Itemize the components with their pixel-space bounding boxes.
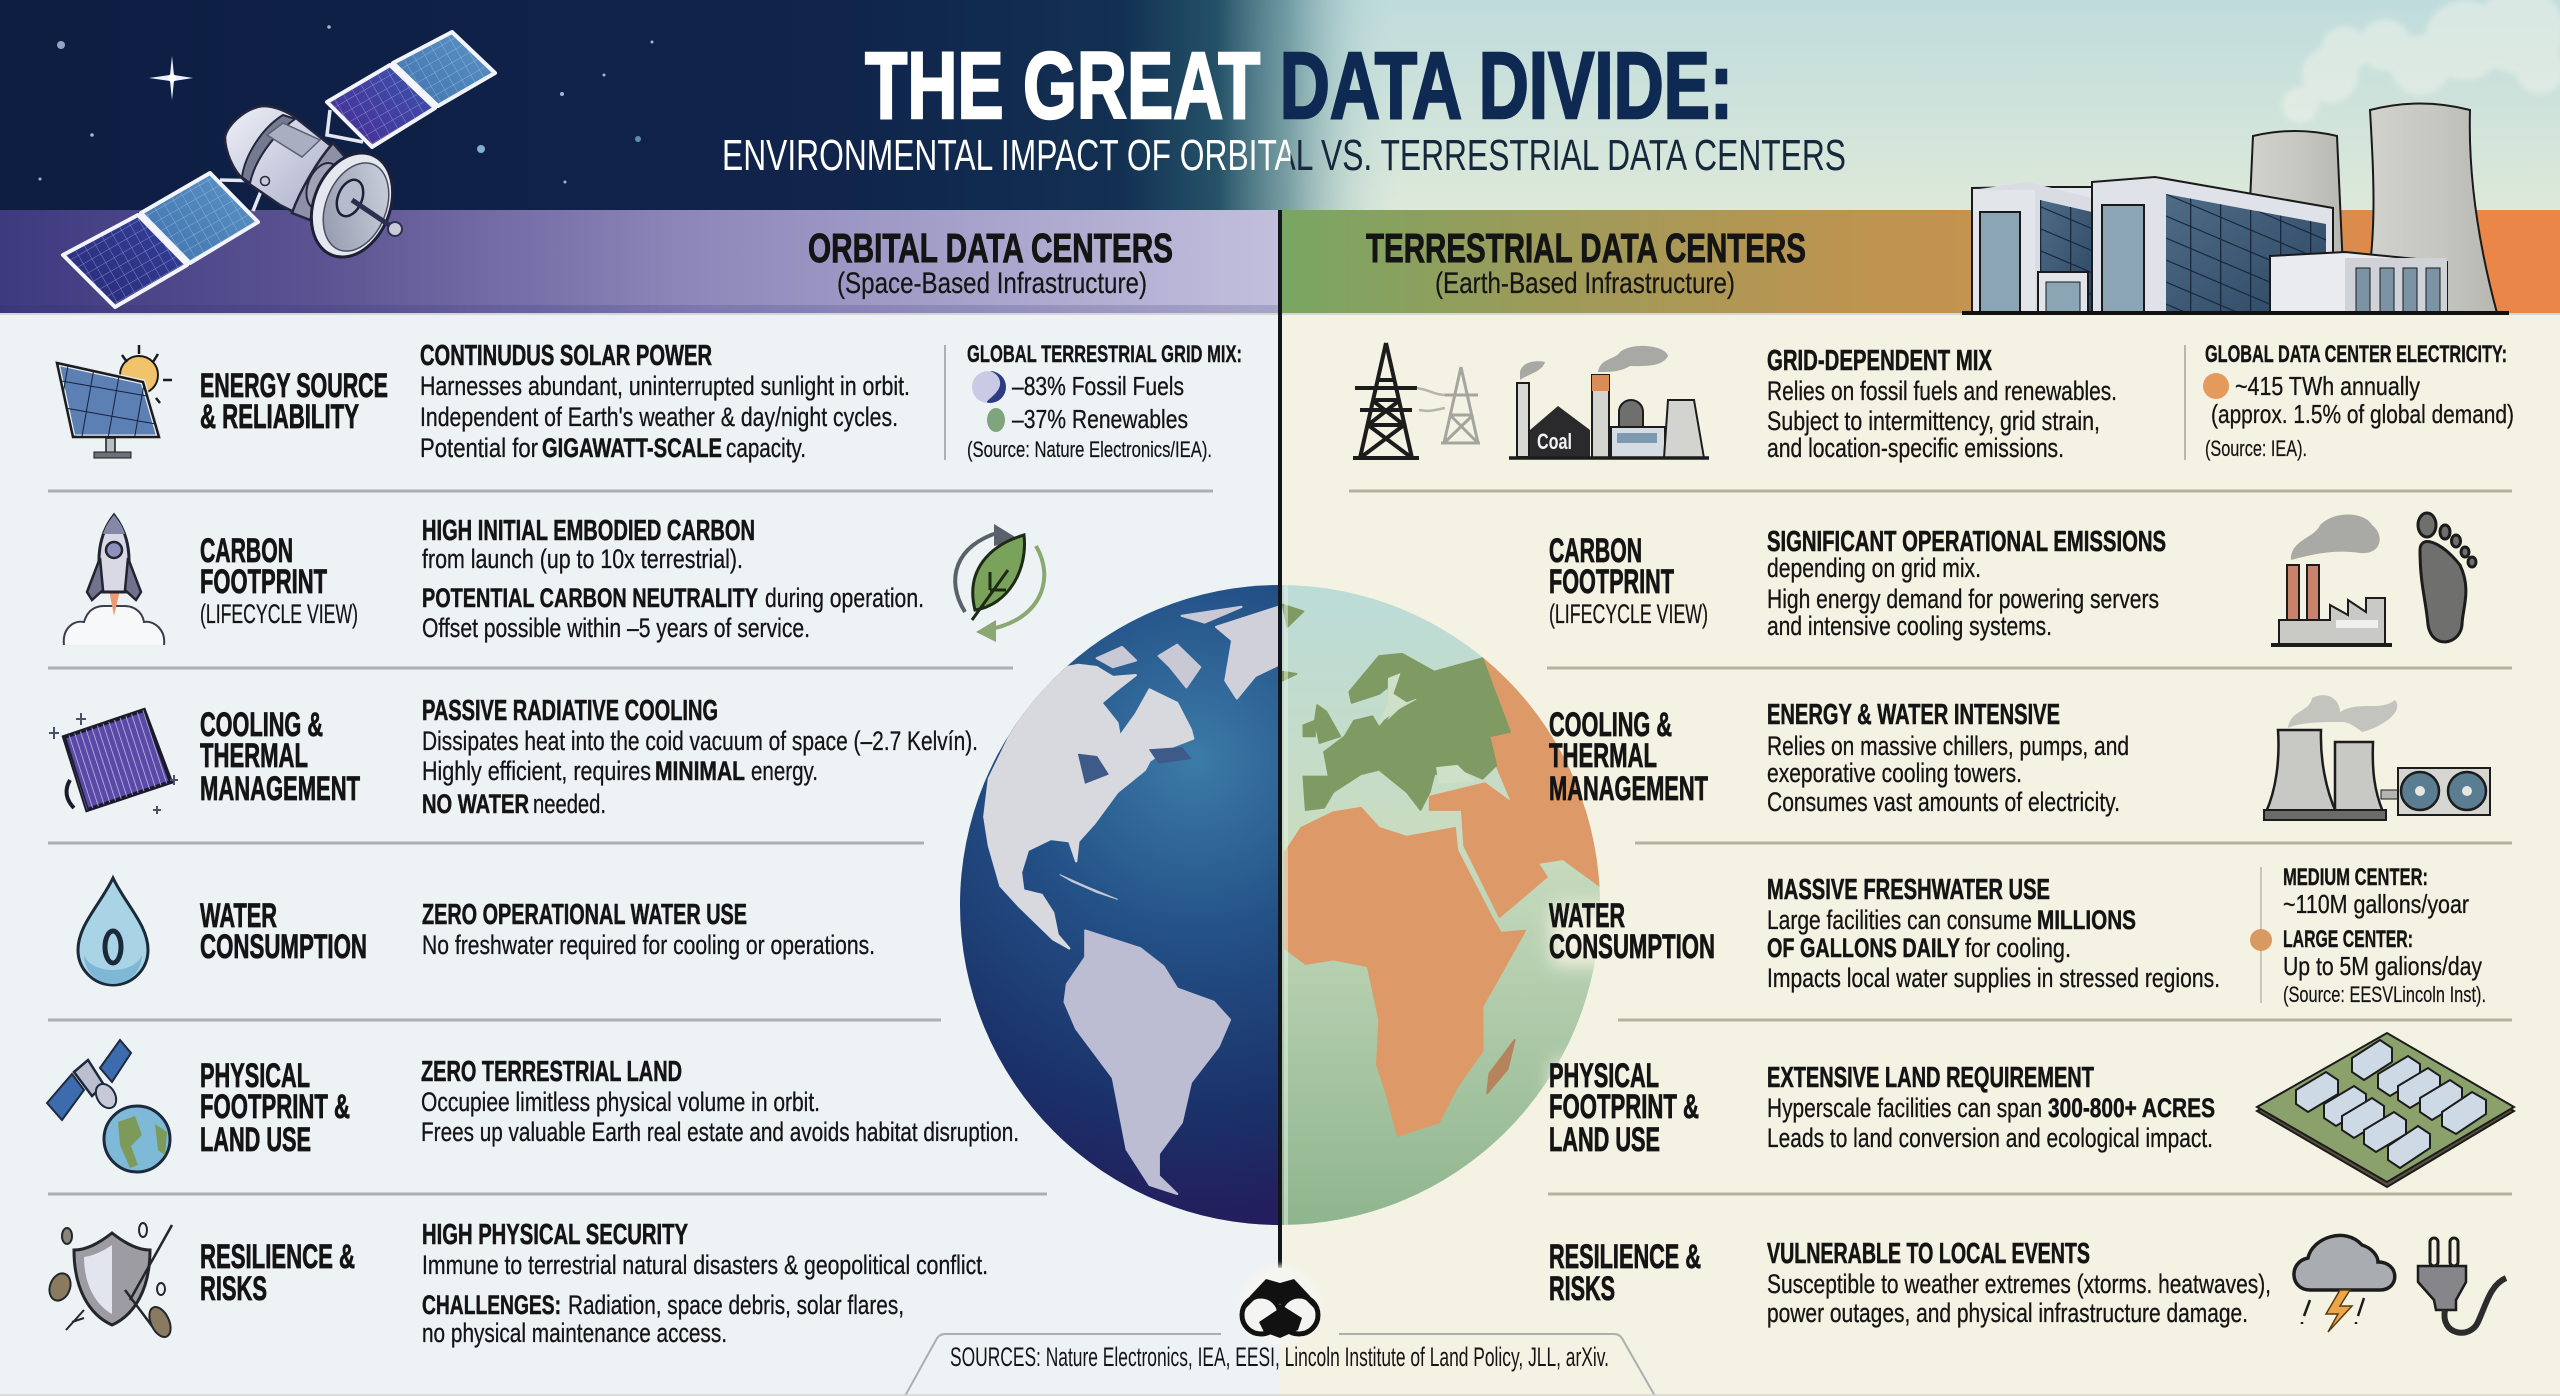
text: high physical security: no physical maintenance access.	[422, 1318, 727, 1348]
icon: solar panel and sun	[57, 345, 172, 458]
stat box: global terrestrial grid mix: GLOBAL TERRESTRIAL GRID MIX:	[967, 341, 1242, 368]
text: massive freshwater use: MILLIONS	[2037, 905, 2136, 935]
panel: orbital energy source	[57, 340, 1242, 463]
text: extensive land requirement: EXTENSIVE LAND REQUIREMENT	[1767, 1062, 2094, 1094]
text: passive radiative cooling: needed.	[533, 789, 606, 819]
label: energy source: & RELIABILITY	[200, 398, 359, 436]
stat box: global terrestrial grid mix: (Source: Nature Electronics/IEA).	[967, 437, 1212, 462]
column header bands	[0, 210, 2560, 315]
label: resilience	[200, 1238, 355, 1308]
label: physical footprint: FOOTPRINT &	[1549, 1088, 1699, 1126]
label: energy source	[200, 367, 388, 436]
stat box: global data center electricity	[2184, 341, 2514, 461]
label: physical footprint: LAND USE	[200, 1121, 311, 1159]
label: physical footprint	[1549, 1057, 1699, 1159]
icon: power plug	[2418, 1238, 2506, 1333]
text: continuous solar power: CONTINUDUS SOLAR POWER	[420, 340, 712, 372]
text: vulnerable to local events: power outages, and physical infrastructure damage.	[1767, 1298, 2248, 1328]
text: embodied carbon: from launch (up to 10x terrestrial).	[422, 544, 743, 574]
label: carbon footprint: FOOTPRINT	[200, 563, 327, 601]
label: physical footprint: LAND USE	[1549, 1121, 1660, 1159]
footer: sources tab: SOURCES: Nature Electronics, IEA, EESI, Lincoln Institute of Land Policy, JLL, arXiv.	[950, 1342, 1609, 1372]
text: high physical security: HIGH PHYSICAL SECURITY	[422, 1219, 688, 1251]
text: zero terrestrial land	[421, 1056, 1019, 1147]
icon: coal power plant: Coal	[1537, 429, 1572, 454]
text: vulnerable to local events	[1767, 1238, 2271, 1328]
label: energy source: ENERGY SOURCE	[200, 367, 388, 405]
text: grid dependent mix: Relies on fossil fuels and renewables.	[1767, 376, 2117, 406]
label: water consumption	[200, 897, 367, 966]
text: passive radiative cooling: energy.	[751, 756, 818, 786]
label: water consumption: WATER	[1549, 897, 1625, 935]
label: cooling: COOLING &	[200, 706, 323, 744]
icon: factory smoke	[2271, 514, 2392, 645]
panel: terrestrial cooling	[1549, 695, 2490, 820]
panel: terrestrial water	[1549, 864, 2486, 1007]
text: high physical security: Immune to terrestrial natural disasters & geopolitical conflict.	[422, 1250, 988, 1280]
text: operational emissions: and intensive cooling systems.	[1767, 611, 2052, 641]
label: physical footprint: PHYSICAL	[200, 1057, 310, 1095]
header background: space to sky	[0, 0, 2560, 210]
text: vulnerable to local events: Susceptible to weather extremes (xtorms. heatwaves),	[1767, 1269, 2271, 1299]
label: water consumption	[1549, 897, 1715, 966]
text: massive freshwater use: OF GALLONS DAILY	[1767, 933, 1960, 963]
text: passive radiative cooling: Dissipates heat into the coid vacuum of space (–2.7 Kelvín).	[422, 726, 978, 756]
heading: terrestrial data centers: (Earth-Based Infrastructure)	[1435, 267, 1735, 300]
text: zero water use	[422, 899, 875, 960]
text: extensive land requirement	[1767, 1062, 2215, 1153]
icon: coal power plant	[1509, 346, 1709, 458]
panel: orbital land use	[47, 1040, 1019, 1172]
text: zero terrestrial land: Occupiee limitless physical volume in orbit.	[421, 1087, 820, 1117]
text: massive freshwater use: MASSIVE FRESHWATER USE	[1767, 874, 2050, 906]
dish	[297, 141, 407, 269]
panel: terrestrial resilience	[1549, 1235, 2506, 1333]
label: cooling: MANAGEMENT	[200, 770, 360, 808]
icon: satellite	[63, 32, 495, 307]
text: passive radiative cooling: Highly efficient, requires	[422, 756, 651, 786]
label: physical footprint: FOOTPRINT &	[200, 1088, 350, 1126]
icon: cooling towers and chiller	[2264, 695, 2490, 820]
text: energy and water intensive: Consumes vast amounts of electricity.	[1767, 787, 2120, 817]
label: resilience: RISKS	[1549, 1270, 1615, 1308]
icon: small satellite and earth	[47, 1040, 170, 1172]
text: zero terrestrial land: ZERO TERRESTRIAL LAND	[421, 1056, 682, 1088]
text: grid dependent mix	[1767, 345, 2117, 463]
label: carbon footprint	[1549, 532, 1708, 629]
text: extensive land requirement: Hyperscale facilities can span	[1767, 1093, 2042, 1123]
icon: storm cloud with lightning	[2294, 1235, 2395, 1332]
title: THE GREAT DATA DIVIDE:	[865, 33, 1733, 139]
text: grid dependent mix: Subject to intermittency, grid strain,	[1767, 406, 2100, 436]
text: operational emissions	[1767, 526, 2166, 641]
stat box: water volumes: MEDIUM CENTER:	[2283, 864, 2428, 891]
label halos on the globe edge	[1552, 905, 1622, 1157]
panel: orbital cooling	[49, 695, 978, 819]
icon: rocket launch	[64, 515, 164, 645]
label: cooling: MANAGEMENT	[1549, 770, 1708, 808]
heading: terrestrial data centers	[1366, 225, 1806, 300]
label: resilience	[1549, 1238, 1701, 1308]
text: energy and water intensive: Relies on massive chillers, pumps, and	[1767, 731, 2129, 761]
text: passive radiative cooling: MINIMAL	[655, 756, 745, 786]
text: vulnerable to local events: VULNERABLE TO LOCAL EVENTS	[1767, 1238, 2090, 1270]
stat box: water volumes: Up to 5M galions/day	[2283, 951, 2482, 981]
text: embodied carbon	[422, 515, 924, 643]
text: continuous solar power: Potential for	[420, 433, 538, 463]
text: embodied carbon: during operation.	[765, 583, 924, 613]
footer: sources tab	[0, 1334, 2560, 1396]
stat box: global data center electricity: ~415 TWh annually	[2235, 371, 2420, 401]
stat box: water volumes: LARGE CENTER:	[2283, 926, 2413, 953]
label: cooling	[200, 706, 360, 808]
icon: transmission pylons	[1353, 343, 1480, 458]
text: grid dependent mix: GRID-DEPENDENT MIX	[1767, 345, 1992, 377]
label: carbon footprint: CARBON	[1549, 532, 1642, 570]
stat box: global terrestrial grid mix	[944, 341, 1242, 462]
icon: binocular globe emblem	[1240, 1265, 1320, 1345]
upper solar array	[327, 32, 495, 147]
heading: orbital data centers: (Space-Based Infrastructure)	[837, 267, 1147, 300]
label: carbon footprint: CARBON	[200, 532, 293, 570]
panel: orbital water	[78, 878, 875, 985]
text: continuous solar power: GIGAWATT-SCALE	[542, 433, 722, 463]
icon: radiator panel	[49, 710, 178, 814]
text: continuous solar power: Harnesses abundant, uninterrupted sunlight in orbit.	[420, 371, 910, 401]
text: extensive land requirement: 300-800+ ACRES	[2048, 1093, 2215, 1123]
text: zero water use: ZERO OPERATIONAL WATER USE	[422, 899, 747, 931]
text: passive radiative cooling	[422, 695, 978, 819]
label: resilience: RESILIENCE &	[1549, 1238, 1701, 1276]
central divider line	[1278, 210, 1288, 1268]
label: cooling	[1549, 706, 1708, 808]
text: embodied carbon: Offset possible within –5 years of service.	[422, 613, 810, 643]
text: continuous solar power	[420, 340, 910, 463]
text: zero terrestrial land: Frees up valuable Earth real estate and avoids habitat disruption.	[421, 1117, 1019, 1147]
icon: water drop with zero	[78, 878, 148, 985]
stat box: water volumes	[2250, 864, 2486, 1007]
panel: terrestrial land use	[1549, 1033, 2514, 1187]
label: carbon footprint: (LIFECYCLE VIEW)	[1549, 599, 1708, 629]
label: carbon footprint: (LIFECYCLE VIEW)	[200, 599, 358, 629]
heading: orbital data centers	[808, 225, 1173, 300]
smoke	[2282, 0, 2560, 123]
label: cooling: COOLING &	[1549, 706, 1672, 744]
text: grid dependent mix: and location-specific emissions.	[1767, 433, 2064, 463]
text: massive freshwater use: Large facilities can consume	[1767, 905, 2032, 935]
label: water consumption: WATER	[200, 897, 277, 935]
label: resilience: RESILIENCE &	[200, 1238, 355, 1276]
heading: orbital data centers: ORBITAL DATA CENTERS	[808, 225, 1173, 271]
text: continuous solar power: Independent of Earth's weather & day/night cycles.	[420, 402, 898, 432]
text: passive radiative cooling: PASSIVE RADIATIVE COOLING	[422, 695, 718, 727]
struts	[220, 110, 363, 211]
icon: terrestrial data center with cooling towers	[1962, 0, 2560, 313]
stat box: global data center electricity: (Source: IEA).	[2205, 436, 2307, 461]
label: carbon footprint: FOOTPRINT	[1549, 563, 1674, 601]
label: cooling: THERMAL	[200, 737, 308, 775]
label: cooling: THERMAL	[1549, 737, 1657, 775]
text: high physical security: Radiation, space debris, solar flares,	[568, 1290, 904, 1320]
right hemisphere: Europe and Africa	[1280, 585, 1609, 1225]
stat box: global terrestrial grid mix: –37% Renewables	[1012, 404, 1188, 434]
text: massive freshwater use	[1767, 874, 2220, 993]
text: high physical security: CHALLENGES:	[422, 1290, 561, 1320]
text: operational emissions: SIGNIFICANT OPERATIONAL EMISSIONS	[1767, 526, 2166, 558]
row dividers	[48, 491, 2512, 1194]
stat box: water volumes: (Source: EESVLincoln Inst).	[2283, 982, 2486, 1007]
text: energy and water intensive: ENERGY & WATER INTENSIVE	[1767, 699, 2060, 731]
left hemisphere: Americas	[960, 585, 1280, 1225]
panel: terrestrial carbon footprint	[1549, 513, 2476, 645]
text: passive radiative cooling: NO WATER	[422, 789, 529, 819]
text: continuous solar power: capacity.	[726, 433, 806, 463]
subtitle: ENVIRONMENTAL IMPACT OF ORBITAL VS. TERRESTRIAL DATA CENTERS	[722, 131, 1846, 180]
label: physical footprint: PHYSICAL	[1549, 1057, 1659, 1095]
panel: orbital carbon footprint	[64, 515, 1044, 645]
text: embodied carbon: POTENTIAL CARBON NEUTRALITY	[422, 583, 758, 613]
stat box: global terrestrial grid mix: –83% Fossil Fuels	[1012, 371, 1184, 401]
text: operational emissions: High energy demand for powering servers	[1767, 584, 2159, 614]
text: embodied carbon: HIGH INITIAL EMBODIED CARBON	[422, 515, 755, 547]
stat box: water volumes: ~110M gallons/yoar	[2283, 889, 2469, 919]
text: energy and water intensive: exeporative cooling towers.	[1767, 758, 2022, 788]
text: operational emissions: depending on grid mix.	[1767, 553, 1981, 583]
text: extensive land requirement: Leads to land conversion and ecological impact.	[1767, 1123, 2213, 1153]
text: energy and water intensive	[1767, 699, 2129, 817]
panel: orbital resilience	[46, 1219, 988, 1348]
label: physical footprint	[200, 1057, 350, 1159]
text: massive freshwater use: Impacts local water supplies in stressed regions.	[1767, 963, 2220, 993]
label: water consumption: CONSUMPTION	[1549, 928, 1715, 966]
icon: hyperscale campus on land plot	[2257, 1033, 2514, 1187]
text: massive freshwater use: for cooling.	[1965, 933, 2071, 963]
icon: shield and debris	[46, 1223, 175, 1340]
lower solar array	[63, 173, 258, 307]
heading: terrestrial data centers: TERRESTRIAL DATA CENTERS	[1366, 225, 1806, 271]
icon: leaf with recycling arrows	[955, 524, 1044, 642]
label: carbon footprint	[200, 532, 358, 629]
panel: terrestrial energy source	[1353, 341, 2514, 463]
globe split between orbital and terrestrial views	[960, 585, 1609, 1225]
label: water consumption: CONSUMPTION	[200, 928, 367, 966]
body cylinder	[225, 106, 345, 220]
icon: footprint	[2418, 513, 2476, 642]
text: high physical security	[422, 1219, 988, 1348]
text: zero water use: No freshwater required for cooling or operations.	[422, 930, 875, 960]
label: resilience: RISKS	[200, 1270, 267, 1308]
